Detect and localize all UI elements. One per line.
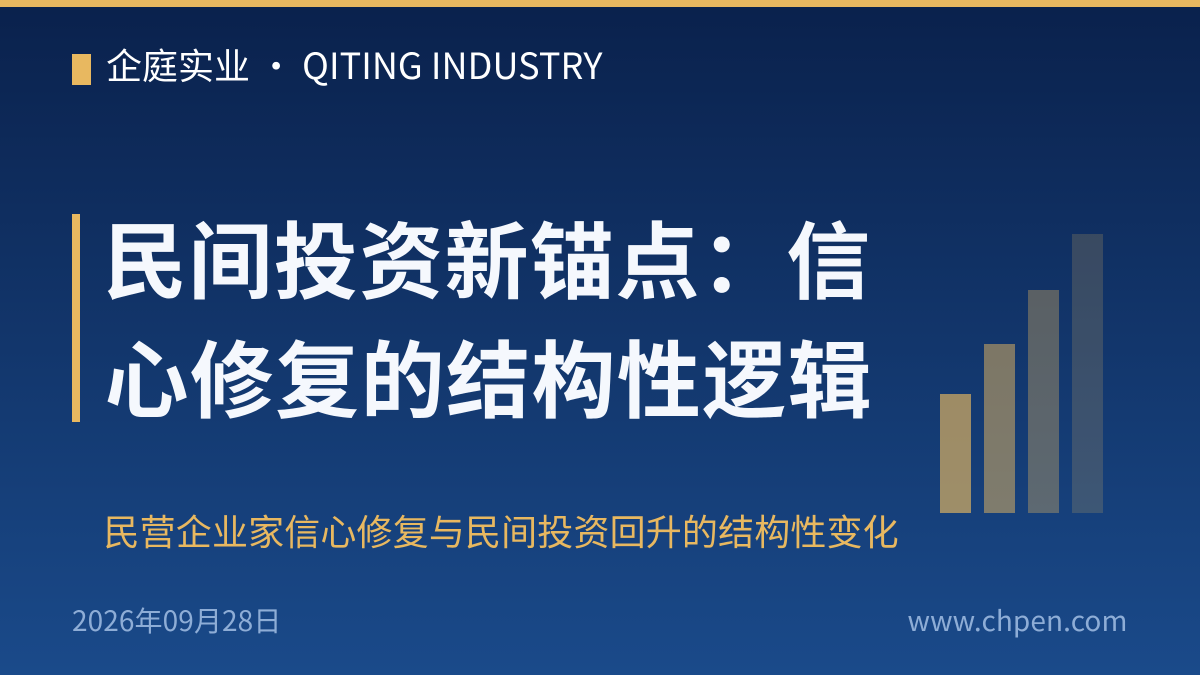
- brand name: 企庭实业 · QITING INDUSTRY: [106, 38, 603, 90]
- top accent bar: [0, 0, 1200, 7]
- title: 民间投资新锚点：信: [103, 196, 872, 317]
- date: 2026年09月28日: [72, 600, 281, 640]
- title: [103, 196, 873, 436]
- bar 3: [1028, 290, 1059, 513]
- title: 心修复的结构性逻辑: [104, 315, 873, 436]
- bar 1: [940, 394, 971, 513]
- bar chart decoration: [940, 234, 1103, 513]
- subtitle: 民营企业家信心修复与民间投资回升的结构性变化: [104, 504, 899, 556]
- bar 4: [1072, 234, 1103, 513]
- title accent bar: [72, 214, 80, 422]
- brand marker: [72, 54, 91, 85]
- bar 2: [984, 344, 1015, 513]
- website: www.chpen.com: [908, 600, 1128, 640]
